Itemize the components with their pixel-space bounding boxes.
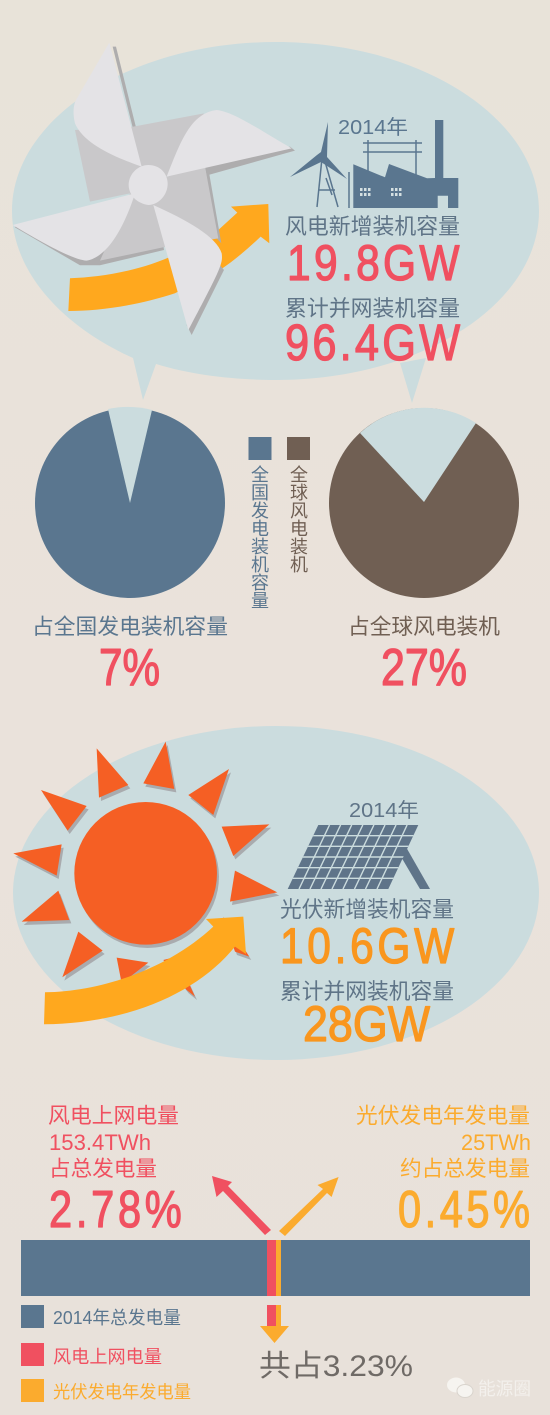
- arrow: solar growth: [44, 917, 246, 1024]
- legend: global wind: 全: [290, 465, 308, 485]
- callout: wind generation: 153.4TWh: [49, 1130, 151, 1155]
- panel: solar power: [13, 726, 539, 1060]
- icon: solar panel roof: [280, 825, 430, 889]
- legend: global wind: 装: [290, 537, 308, 557]
- factory windows: [360, 188, 402, 196]
- legend: global wind: 机: [290, 555, 308, 575]
- total: 3.23%: 共占3.23%: [259, 1350, 413, 1383]
- pie: national capacity 7%: [35, 407, 225, 598]
- legend: national capacity: 全: [251, 465, 269, 485]
- pie: global wind 27%: [329, 408, 519, 598]
- label: cumulative wind capacity: 累计并网装机容量: [285, 296, 460, 321]
- legend: wind generation: [21, 1343, 162, 1367]
- pinwheel hub: [129, 165, 168, 205]
- legend: national capacity: 容: [251, 573, 269, 593]
- watermark: [447, 1378, 531, 1399]
- legend: total generation: 2014年总发电量: [53, 1308, 181, 1328]
- blade: top: [74, 43, 142, 167]
- panel: generation share: [21, 1104, 531, 1402]
- callout: wind generation: [48, 1104, 182, 1238]
- legend: global wind: 风: [290, 501, 308, 521]
- sun shadow: [15, 745, 279, 1000]
- label: new solar capacity: 光伏新增装机容量: [280, 897, 454, 922]
- label: new wind capacity: 风电新增装机容量: [285, 214, 460, 239]
- legend: national capacity: 国: [251, 483, 269, 503]
- sun disc: [74, 802, 217, 945]
- year label: wind: 2014年: [338, 116, 408, 139]
- value: 19.8GW: 19.8GW: [287, 235, 460, 291]
- legend: total generation: [21, 1305, 181, 1328]
- blade: right: [167, 110, 292, 177]
- callout: wind generation: 风电上网电量: [48, 1104, 179, 1128]
- bubble: solar: [13, 726, 539, 1060]
- value: 27%: 27%: [381, 639, 467, 697]
- power lines: [363, 140, 422, 178]
- speech bubble: wind: [12, 42, 539, 403]
- callout: solar generation: 约占总发电量: [400, 1157, 530, 1181]
- value: 7%: 7%: [99, 639, 160, 697]
- arrow: solar share: [279, 1177, 339, 1236]
- arrow: wind share: [212, 1176, 271, 1235]
- arrow: combined share: [260, 1305, 289, 1343]
- legend: global wind: [287, 437, 310, 575]
- pinwheel folds: [75, 113, 218, 261]
- callout: solar generation: [356, 1104, 531, 1238]
- panel: wind power: [12, 42, 539, 403]
- factory: [353, 120, 458, 208]
- value: 10.6GW: 10.6GW: [280, 918, 454, 974]
- callout: wind generation: 占总发电量: [49, 1157, 157, 1181]
- value: 28GW: 28GW: [303, 996, 431, 1052]
- legend: national capacity: 发: [251, 501, 269, 521]
- legend: national capacity: [248, 437, 272, 611]
- label: share of global wind: 占全球风电装机: [348, 615, 500, 639]
- blade: left: [13, 193, 135, 261]
- callout: solar generation: 25TWh: [461, 1130, 531, 1155]
- callout: wind generation: 2.78%: [49, 1180, 182, 1238]
- legend: global wind: 球: [290, 483, 308, 503]
- value: 96.4GW: 96.4GW: [285, 315, 460, 372]
- legend: global wind: 电: [290, 519, 308, 539]
- label: cumulative solar capacity: 累计并网装机容量: [280, 979, 454, 1004]
- arrow: wind growth: [68, 204, 269, 311]
- watermark: 能源圈: [478, 1379, 531, 1399]
- legend: national capacity: 电: [251, 519, 269, 539]
- wind turbine: [290, 122, 347, 179]
- icon: turbine and factory: [290, 120, 458, 208]
- legend: national capacity: 机: [251, 555, 269, 575]
- pinwheel shadows: [15, 47, 295, 335]
- legend: national capacity: 装: [251, 537, 269, 557]
- label: share of national capacity: 占全国发电装机容量: [32, 615, 228, 639]
- bar: total generation: [21, 1240, 530, 1296]
- callout: solar generation: 光伏发电年发电量: [356, 1104, 530, 1128]
- icon: sun with arrow: [13, 742, 279, 1024]
- panel: share pies: [32, 407, 519, 697]
- legend: solar generation: [21, 1379, 191, 1402]
- legend: solar generation: 光伏发电年发电量: [53, 1382, 191, 1402]
- callout: solar generation: 0.45%: [398, 1180, 530, 1238]
- year label: solar: 2014年: [349, 799, 419, 822]
- icon: pinwheel with arrow: [13, 43, 295, 335]
- legend: national capacity: 量: [251, 591, 269, 611]
- blade: bottom: [153, 205, 222, 330]
- sun rays: [13, 742, 277, 997]
- legend: wind generation: 风电上网电量: [53, 1347, 162, 1367]
